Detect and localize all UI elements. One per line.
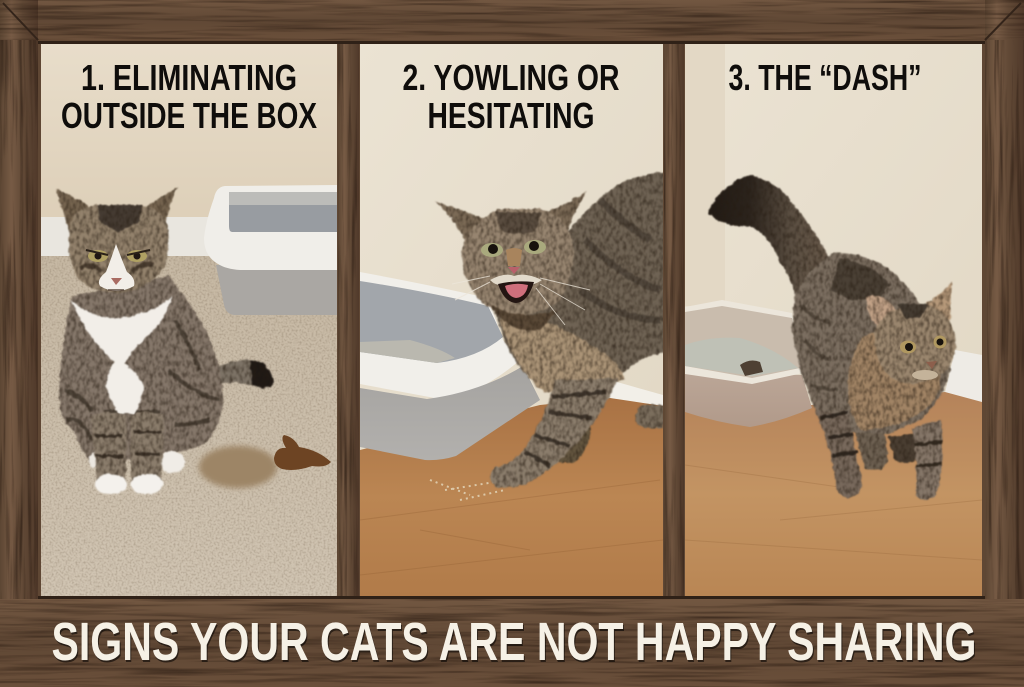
tail and torso (59, 276, 274, 466)
wall and wood floor background (685, 44, 982, 596)
rear foreleg (558, 426, 592, 464)
far legs (888, 433, 918, 463)
cat sitting (56, 187, 274, 494)
litter box (360, 272, 540, 460)
panel: yowling or hesitating (360, 44, 668, 596)
face (86, 244, 150, 291)
face (452, 240, 590, 325)
heading: panel 2: HESITATING (428, 95, 594, 136)
tail (708, 175, 828, 295)
torso (792, 253, 950, 434)
hind leg (815, 410, 862, 498)
heading: panel 2 (402, 57, 620, 136)
head and ears (56, 187, 178, 292)
torso (490, 172, 668, 392)
wall and wood floor background (360, 44, 663, 596)
wall and carpet background (41, 44, 337, 596)
scattered litter (430, 479, 504, 501)
ears and head (435, 201, 484, 240)
heading: panel 2: 2. YOWLING OR (402, 57, 620, 98)
litter box (204, 185, 337, 315)
cat arching and yowling (436, 172, 668, 488)
near front leg (912, 420, 942, 500)
fur and body (436, 172, 668, 488)
icon: poop (274, 435, 331, 470)
panel: the dash (685, 44, 982, 596)
heading: panel 1: OUTSIDE THE BOX (61, 95, 317, 136)
cat running away (708, 175, 956, 500)
litter box with waste (685, 300, 812, 427)
front leg (490, 378, 618, 488)
face (900, 336, 946, 380)
ears and head (865, 294, 896, 326)
heading: panel 1: 1. ELIMINATING (81, 57, 297, 98)
fur and body (708, 175, 956, 500)
white chest (71, 296, 172, 414)
front legs (91, 412, 164, 482)
front paws (95, 474, 163, 494)
heading: panel 3: 3. THE “DASH” (728, 57, 922, 98)
heading: panel 1 (61, 57, 317, 136)
stain on carpet (199, 446, 277, 488)
white back paws (89, 451, 185, 473)
back paw (635, 405, 664, 428)
panel: eliminating outside the box (41, 44, 337, 596)
